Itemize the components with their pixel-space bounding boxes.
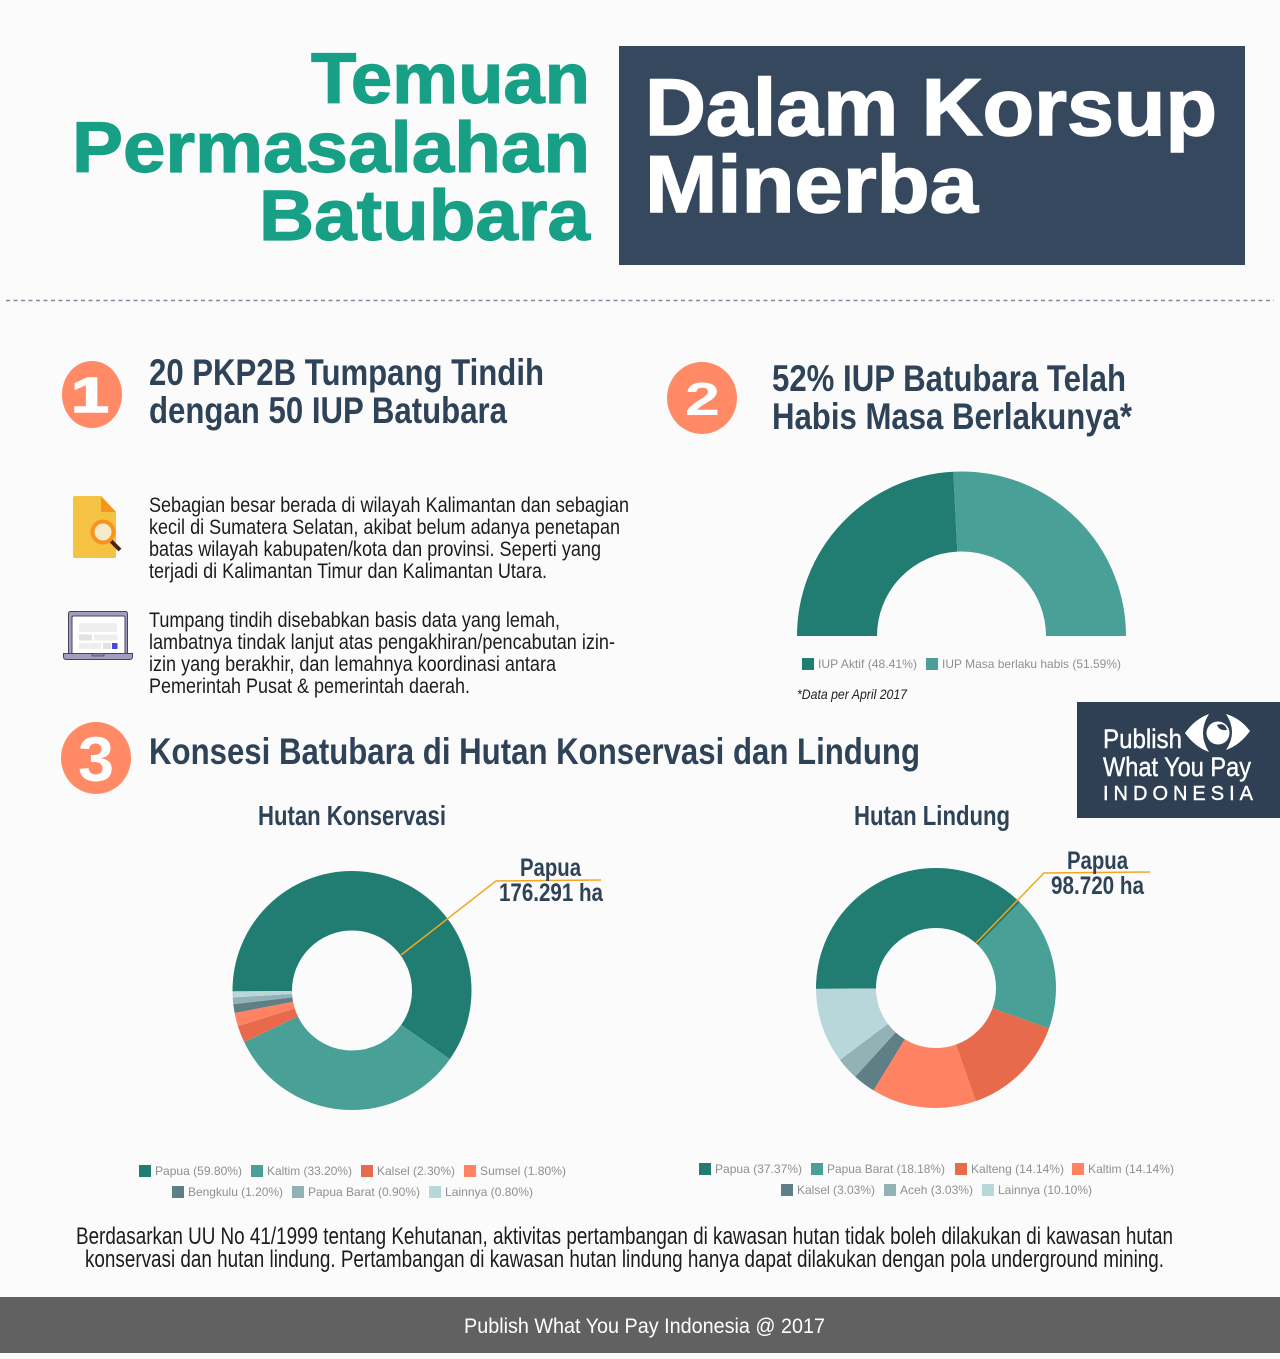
heading 2: Habis Masa Berlakunya*	[772, 396, 1132, 437]
text block: causes of overlap: lambatnya tindak lanjut atas pengakhiran/pencabutan izin-	[149, 631, 615, 654]
heading 1	[149, 352, 544, 431]
text block: location of overlap: terjadi di Kalimantan Timur dan Kalimantan Utara.	[149, 560, 547, 583]
number badge 1: 1	[71, 369, 109, 423]
donut chart: Hutan Lindung	[846, 898, 1026, 1078]
subheading: Hutan Lindung: Hutan Lindung	[854, 800, 1010, 831]
legend: Hutan Lindung: Kalteng (14.14%)	[971, 1162, 1064, 1176]
heading 3: Konsesi Batubara di Hutan Konservasi dan Lindung	[149, 731, 920, 772]
title panel: Dalam Korsup Minerba: Minerba	[645, 140, 979, 230]
number badge 3: 3	[78, 725, 114, 795]
legend: Hutan Konservasi	[139, 1164, 566, 1199]
callout: Papua 176.291 ha: 176.291 ha	[499, 879, 604, 907]
legend: Hutan Lindung: Papua Barat (18.18%)	[827, 1162, 945, 1176]
logo: Publish What You Pay Indonesia: What You Pay	[1103, 752, 1251, 782]
heading 2	[772, 358, 1132, 437]
legend: Hutan Konservasi: Papua (59.80%)	[155, 1164, 242, 1178]
heading 1: dengan 50 IUP Batubara	[149, 390, 507, 431]
legend: Hutan Lindung: Kalsel (3.03%)	[797, 1183, 875, 1197]
title: Temuan Permasalahan Batubara: Batubara	[259, 177, 591, 256]
callout: Papua 98.720 ha: 98.720 ha	[1051, 872, 1145, 900]
text block: location of overlap: Sebagian besar berada di wilayah Kalimantan dan sebagian	[149, 494, 629, 517]
logo: Publish What You Pay Indonesia: Publish	[1103, 724, 1182, 754]
callout: Papua 98.720 ha: Papua	[1067, 847, 1129, 875]
legend: Hutan Lindung: Kaltim (14.14%)	[1088, 1162, 1174, 1176]
text block: causes of overlap: Pemerintah Pusat & pemerintah daerah.	[149, 675, 470, 698]
text block: causes of overlap: Tumpang tindih disebabkan basis data yang lemah,	[149, 609, 560, 632]
text block: causes of overlap	[149, 609, 615, 698]
text block: location of overlap: batas wilayah kabupaten/kota dan provinsi. Seperti yang	[149, 538, 601, 561]
number badge 1	[62, 361, 122, 428]
legend: Hutan Lindung: Lainnya (10.10%)	[998, 1183, 1092, 1197]
number badge 2: 2	[685, 373, 720, 425]
callout: Papua 176.291 ha	[401, 854, 604, 955]
text block: location of overlap: kecil di Sumatera Selatan, akibat belum adanya penetapan	[149, 516, 620, 539]
donut chart: Hutan Konservasi	[262, 901, 442, 1080]
note: data date: *Data per April 2017	[797, 686, 908, 702]
title: Temuan Permasalahan Batubara: Temuan	[311, 40, 590, 119]
title panel: Dalam Korsup Minerba	[619, 46, 1245, 265]
icon: laptop	[64, 612, 132, 660]
heading 1: 20 PKP2B Tumpang Tindih	[149, 352, 544, 393]
text block: causes of overlap: izin yang berakhir, dan lemahnya koordinasi antara	[149, 653, 556, 676]
logo: Publish What You Pay Indonesia: INDONESIA	[1103, 783, 1254, 805]
legend: Hutan Lindung: Aceh (3.03%)	[900, 1183, 973, 1197]
title panel: Dalam Korsup Minerba: Dalam Korsup	[645, 63, 1217, 153]
number badge 2	[667, 362, 737, 434]
text block: location of overlap	[149, 494, 629, 583]
legend: Hutan Konservasi: Papua Barat (0.90%)	[308, 1185, 420, 1199]
title: Temuan Permasalahan Batubara: Permasalahan	[72, 109, 590, 188]
legend: IUP status	[802, 657, 1121, 671]
number badge 3	[61, 722, 131, 795]
callout: Papua 176.291 ha: Papua	[520, 854, 582, 882]
icon: document with magnifier	[73, 496, 120, 558]
legend: Hutan Konservasi: Sumsel (1.80%)	[480, 1164, 566, 1178]
footer: Publish What You Pay Indonesia @ 2017	[464, 1315, 825, 1338]
legend: Hutan Konservasi: Kaltim (33.20%)	[267, 1164, 352, 1178]
text block: legal conclusion	[76, 1223, 1173, 1273]
legend: Hutan Konservasi: Lainnya (0.80%)	[445, 1185, 533, 1199]
legend: Hutan Konservasi: Bengkulu (1.20%)	[188, 1185, 283, 1199]
callout: Papua 98.720 ha	[976, 847, 1150, 943]
legend: Hutan Lindung: Papua (37.37%)	[715, 1162, 802, 1176]
subheading: Hutan Konservasi: Hutan Konservasi	[258, 800, 446, 831]
logo: Publish What You Pay Indonesia	[1077, 702, 1280, 818]
legend: IUP status: IUP Aktif (48.41%)	[818, 657, 917, 671]
legend: Hutan Lindung	[699, 1162, 1174, 1197]
legend: Hutan Konservasi: Kalsel (2.30%)	[377, 1164, 455, 1178]
heading 2: 52% IUP Batubara Telah	[772, 358, 1126, 399]
legend: IUP status: IUP Masa berlaku habis (51.59%)	[942, 657, 1121, 671]
half donut chart: IUP status	[837, 512, 1086, 760]
footer	[0, 1297, 1280, 1353]
title: Temuan Permasalahan Batubara	[72, 40, 591, 256]
